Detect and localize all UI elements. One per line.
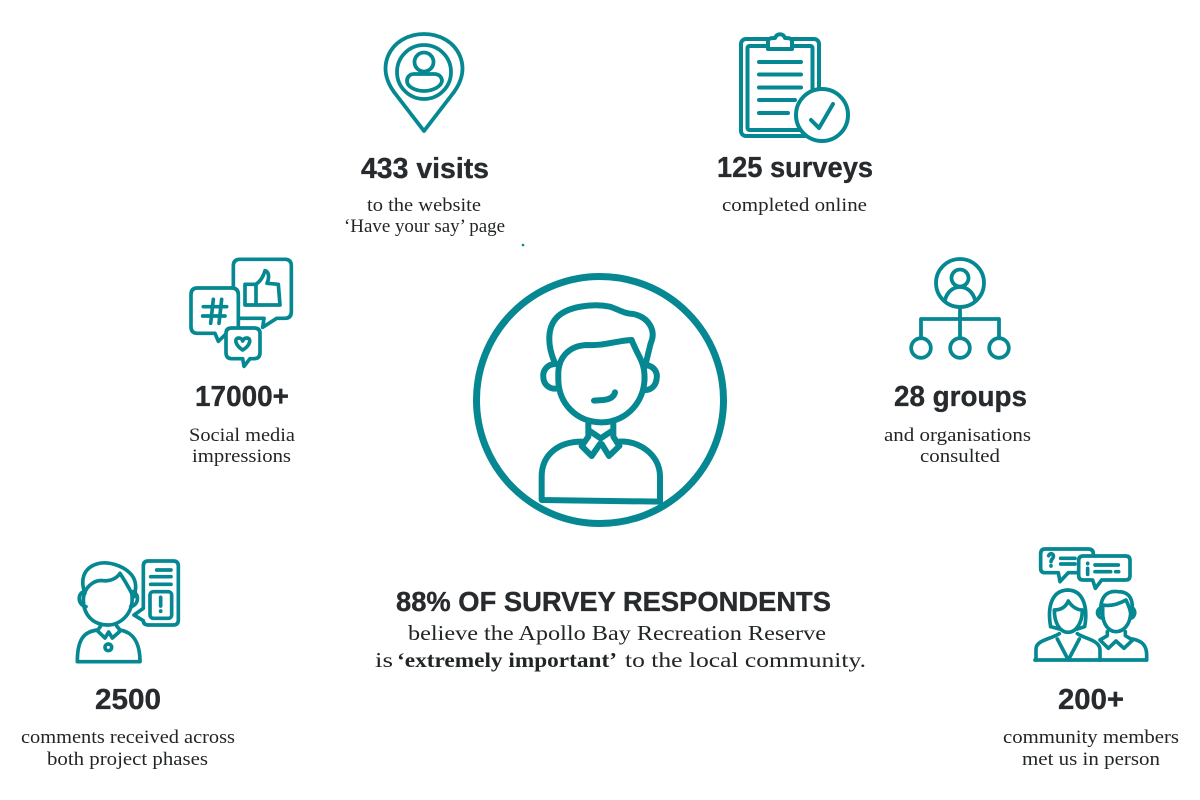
stat: 200+ community members: met us in person (1022, 749, 1161, 770)
icon: person with comment bubble (77, 561, 178, 662)
stat: 17000+ impressions: 17000+ (195, 381, 289, 413)
stat: 200+ community members (1003, 684, 1179, 770)
stat: 200+ community members: community members (1003, 727, 1179, 748)
stat: 125 surveys (717, 152, 873, 216)
stat: 28 groups: and organisations (884, 425, 1031, 446)
stat: 28 groups: 28 groups (894, 381, 1027, 413)
stat: 17000+ impressions: impressions (192, 446, 291, 467)
headline: 88% of survey respondents: is (375, 648, 393, 672)
icon: two people talking (1035, 549, 1147, 660)
stat: 17000+ impressions: Social media (189, 425, 296, 446)
icon: organisation tree (911, 259, 1009, 358)
headline: 88% of survey respondents: to the local community. (625, 648, 866, 672)
stat: 28 groups (884, 381, 1031, 467)
icon: clipboard with check mark (741, 34, 848, 141)
headline: 88% of survey respondents: ‘extremely important’ (397, 648, 617, 672)
stat: 125 surveys: 125 surveys (717, 152, 873, 184)
headline: 88% of survey respondents: believe the Apollo Bay Recreation Reserve (408, 621, 826, 645)
stat: 2500 comments: comments received across (21, 727, 235, 748)
stat: 433 visits: 433 visits (361, 153, 489, 185)
headline: 88% of survey respondents: 88% OF SURVEY RESPONDENTS (396, 586, 831, 617)
stat: 200+ community members: 200+ (1058, 684, 1124, 716)
headline: 88% of survey respondents (375, 586, 866, 672)
icon: social media bubbles (191, 259, 291, 366)
stat: 2500 comments: 2500 (95, 684, 161, 716)
icon: location pin with user (386, 34, 462, 131)
stat: 2500 comments (21, 684, 235, 770)
stat: 433 visits: ‘Have your say’ page (344, 216, 505, 237)
stat: 433 visits (344, 153, 505, 237)
stat: 28 groups: consulted (920, 446, 1001, 467)
stat: 125 surveys: completed online (722, 195, 867, 216)
stat: 2500 comments: both project phases (47, 749, 208, 770)
icon: central person in circle (476, 276, 724, 524)
stat: 17000+ impressions (189, 381, 296, 467)
stat: 433 visits: to the website (367, 195, 481, 216)
decorative teal dot (522, 244, 524, 246)
